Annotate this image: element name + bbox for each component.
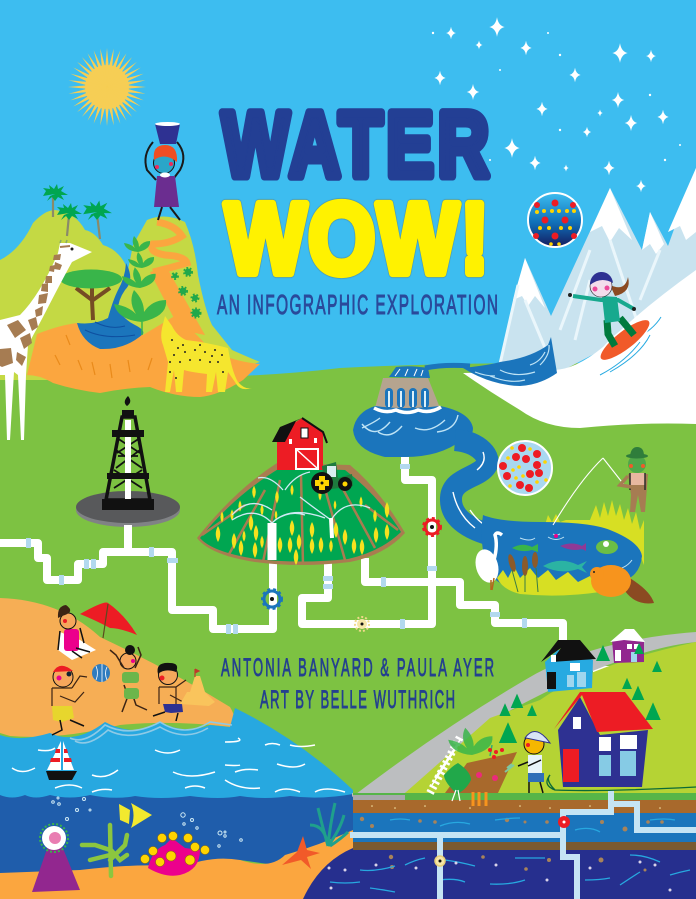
pipe connectors [26,464,527,634]
savanna hills [0,210,260,397]
big navy house with red roof [554,692,653,787]
mountains [500,168,696,372]
icon: sun [68,48,146,126]
beachgoers: boy with sandcastle [153,663,215,721]
title: WATER: WATER [222,93,489,196]
heron [472,533,502,590]
purple house [610,629,645,663]
dam [375,366,440,408]
pine trees [499,643,662,743]
sea [0,708,353,800]
pipe network [0,457,633,670]
woman carrying bucket [145,122,183,220]
yellow fish [119,803,152,828]
snow slope [463,270,696,428]
oil derrick on platform [76,396,180,527]
deep sea [0,794,353,875]
fisherman [553,447,648,525]
shoreline foam [70,722,232,743]
beachgoers: boy with cap [52,664,110,735]
orange starfish [282,836,320,869]
glacier water and river to dam [425,337,557,386]
beachgoers: woman in green [110,645,147,712]
tractor [311,462,353,494]
fence and vegetable garden [430,728,517,806]
underground layers [303,800,696,899]
sea anemone on purple rock [32,824,80,892]
circle of dissolved particles [498,441,552,495]
sea waves [12,738,345,792]
reeds behind pond [545,500,644,565]
gardener with hose [505,732,696,793]
molecule circle [528,193,582,247]
valves [262,518,441,631]
palm trees [43,184,112,239]
giraffe [0,240,92,440]
road end strip [353,795,405,800]
bubbles [52,797,242,847]
beaver [590,565,654,604]
underground pipes [350,790,696,899]
waterfall and watering hole [77,263,143,349]
pink coral [140,832,210,876]
beachgoers: sunbather and umbrella [58,602,137,660]
underground valves [435,816,570,866]
road [352,632,696,797]
pond plants and fish [497,534,632,596]
sailboat [46,741,77,780]
farm mound with crops [197,463,405,565]
blue house with black roof [541,640,596,692]
seaweed [310,803,348,846]
acacia tree [60,270,122,320]
stars in the night corner [432,17,681,192]
leafy plants [114,236,200,335]
cheetah [161,316,252,392]
sand sea floor [0,830,353,899]
snowboarder [568,272,661,375]
title: WOW!: WOW! [225,182,489,295]
authors: ANTONIA BANYARD & PAULA AYER [221,655,494,682]
subtitle: AN INFOGRAPHIC EXPLORATION [217,289,498,320]
illustrator: ART BY BELLE WUTHRICH [260,687,455,714]
red barn [272,418,327,470]
green ground [0,363,696,899]
green coral [82,825,127,876]
grass strip [353,793,696,801]
pond [482,515,642,592]
neighbourhood lawn [405,642,696,800]
beach sand [0,598,235,737]
reservoir and river [353,406,505,538]
